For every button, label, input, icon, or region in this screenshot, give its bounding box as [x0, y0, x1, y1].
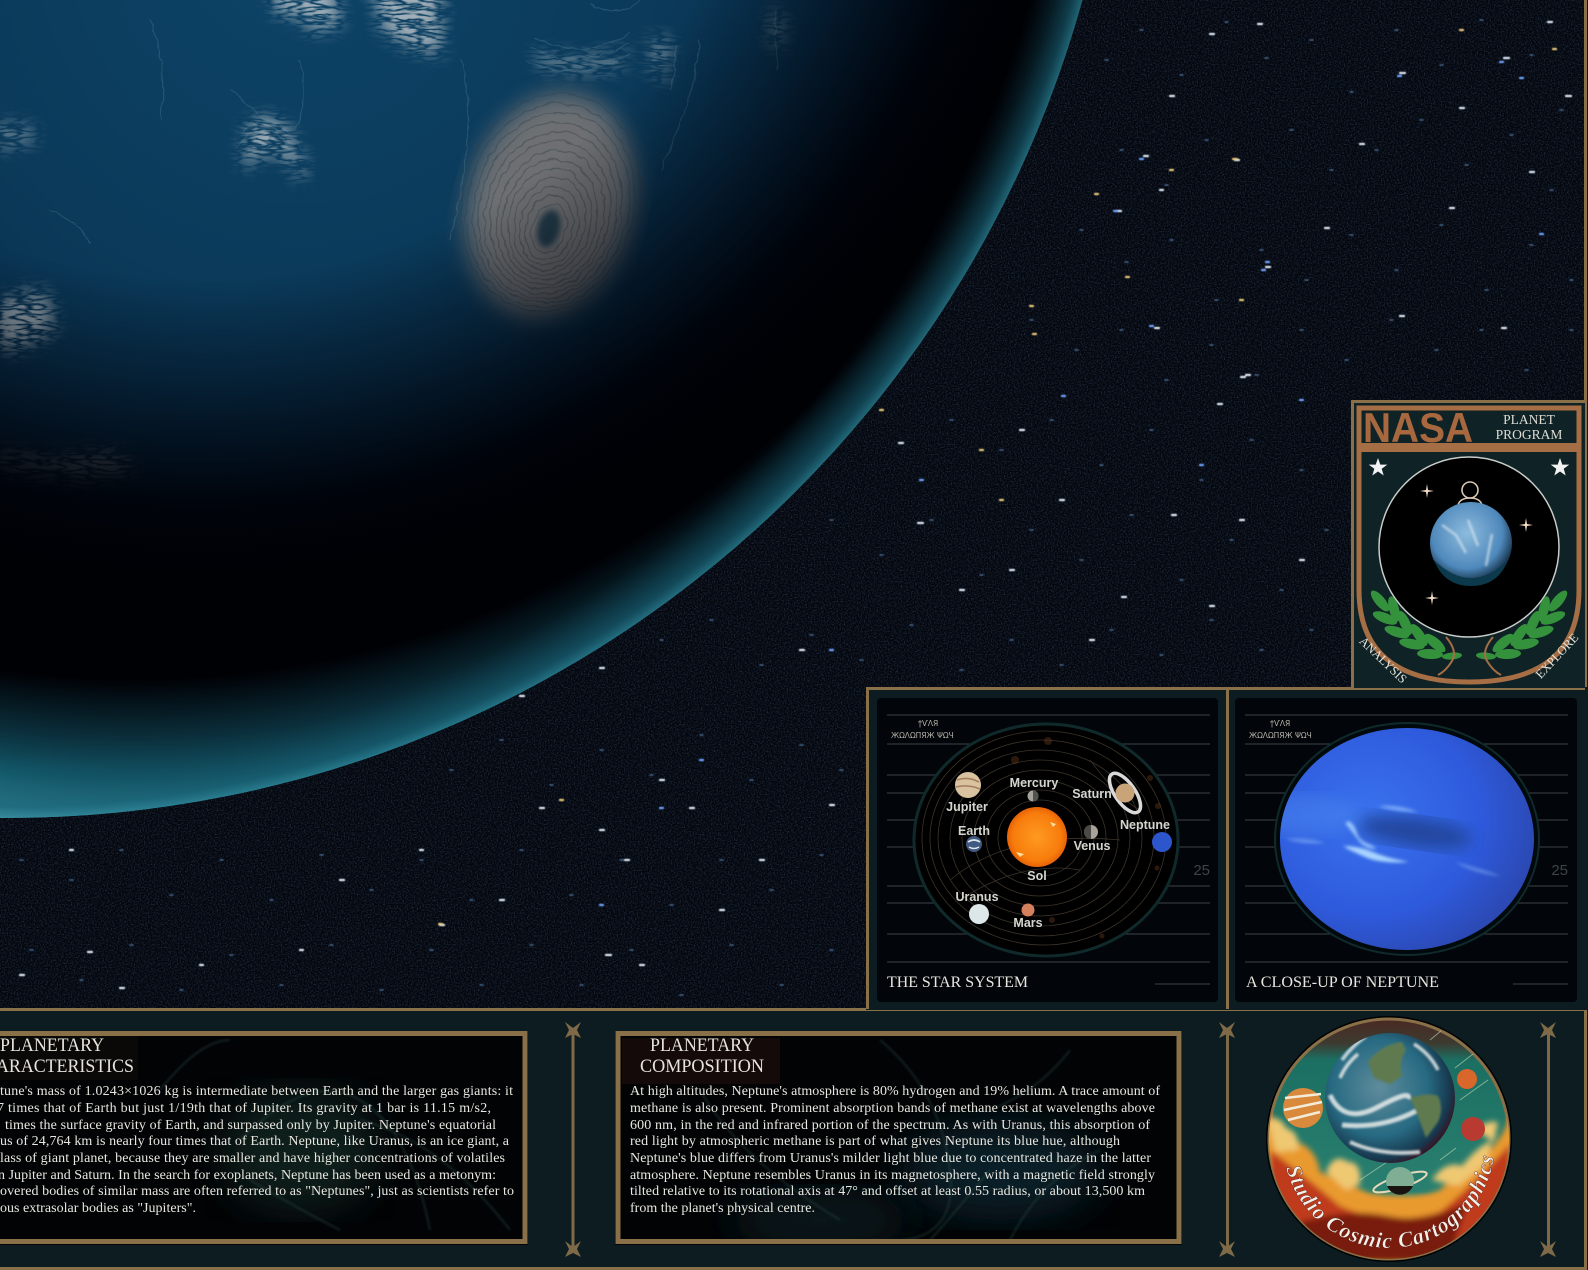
heading	[622, 1036, 780, 1084]
body text: methane is also present. Prominent absorption bands of methane exist at wavelengths above	[630, 1101, 1155, 1116]
script caption: ЖΩΛΩΠЯЖ ΨΩЧ	[891, 731, 954, 740]
clouds	[1269, 1112, 1509, 1259]
ANALYSIS label: ANALYSIS	[1356, 634, 1410, 686]
Neptune	[1120, 818, 1172, 852]
script caption: ϯѴΛЯ	[1270, 719, 1290, 728]
bottom band background	[0, 1008, 1588, 1270]
Sol	[1007, 807, 1067, 883]
saturn	[1372, 1167, 1428, 1196]
divider with ornaments	[1540, 1022, 1556, 1257]
astronaut icon	[1458, 482, 1482, 505]
earth	[1325, 1033, 1455, 1163]
heading	[0, 1036, 138, 1080]
Uranus: Uranus	[955, 890, 999, 904]
Earth	[958, 824, 990, 852]
star icons	[1369, 458, 1569, 476]
cloud bands	[0, 0, 782, 484]
laurel wreath	[1368, 588, 1570, 660]
panel: planetary characteristics	[0, 1031, 528, 1245]
body text: tune's mass of 1.0243×1026 kg is intermediate between Earth and the larger gas giants: it	[0, 1084, 513, 1099]
Mars: Mars	[1013, 916, 1043, 930]
panel title: A CLOSE-UP OF NEPTUNE	[1246, 974, 1439, 991]
shield outline	[1359, 408, 1579, 682]
stripes	[1360, 1030, 1488, 1180]
script caption: ϯѴΛЯ	[918, 719, 938, 728]
Neptune disc	[1274, 722, 1540, 956]
script caption	[891, 719, 954, 740]
body text: ous extrasolar bodies as "Jupiters".	[0, 1201, 196, 1216]
body text: red light by atmospheric methane is part of what gives Neptune its blue hue, although	[630, 1134, 1120, 1149]
program label: PROGRAM	[1496, 427, 1562, 442]
body text: 7 times that of Earth but just 1/19th that of Jupiter. Its gravity at 1 bar is 11.15 m/s2,	[0, 1101, 491, 1116]
blue planet	[1430, 502, 1512, 586]
heading: PLANETARY	[650, 1036, 754, 1056]
curved studio name: Studio Cosmic Cartographics	[1286, 1155, 1494, 1248]
Venus	[1074, 825, 1110, 853]
Mercury	[1010, 776, 1058, 802]
Mercury: Mercury	[1010, 776, 1058, 790]
studio seal	[1266, 1016, 1512, 1262]
badge: NASA planet program	[1351, 400, 1585, 688]
sparkle stars	[1420, 484, 1533, 605]
heading: ARACTERISTICS	[0, 1057, 134, 1077]
Jupiter	[946, 772, 988, 814]
body text: times the surface gravity of Earth, and surpassed only by Jupiter. Neptune's equatorial	[5, 1118, 496, 1133]
body text: atmosphere. Neptune resembles Uranus in its magnetosphere, with a magnetic field strongly	[630, 1168, 1155, 1183]
divider with ornaments	[1219, 1022, 1235, 1257]
orange planet	[1457, 1069, 1477, 1089]
cyclone storm	[451, 78, 648, 328]
divider with ornaments	[565, 1022, 581, 1257]
body text: from the planet's physical centre.	[630, 1201, 815, 1216]
body text: us of 24,764 km is nearly four times that of Earth. Neptune, like Uranus, is an ice giant, a	[0, 1134, 510, 1149]
panel: close-up of Neptune	[1235, 698, 1577, 1002]
body text: overed bodies of similar mass are often referred to as "Neptunes", just as scientists refer to	[0, 1184, 514, 1199]
star field background	[0, 0, 1588, 1010]
atmospheric rim glow	[0, 0, 1090, 840]
panel frame: star system	[866, 687, 1588, 1010]
script caption: ЖΩΛΩΠЯЖ ΨΩЧ	[1249, 731, 1312, 740]
EXPLORE label: EXPLORE	[1533, 630, 1582, 681]
panel title: THE STAR SYSTEM	[887, 974, 1028, 991]
body text: Neptune's blue differs from Uranus's milder light blue due to concentrated haze in the latter	[630, 1151, 1151, 1166]
body text: tilted relative to its rotational axis at 47° and offset at least 0.55 radius, or about 13,500 km	[630, 1184, 1145, 1199]
Saturn: Saturn	[1072, 787, 1112, 801]
Jupiter: Jupiter	[946, 800, 988, 814]
Venus: Venus	[1074, 839, 1110, 853]
Sol: Sol	[1027, 869, 1047, 883]
swirl texture	[160, 1040, 510, 1230]
script caption	[1249, 719, 1312, 740]
Neptune: Neptune	[1120, 818, 1170, 832]
body text	[630, 1084, 1160, 1216]
heading: PLANETARY	[0, 1036, 104, 1056]
body text: n Jupiter and Saturn. In the search for exoplanets, Neptune has been used as a metonym:	[0, 1168, 496, 1183]
body text	[0, 1084, 514, 1216]
page number: 25	[1551, 862, 1568, 879]
Saturn	[1072, 768, 1146, 818]
wreath branches	[1438, 637, 1501, 675]
program label	[1496, 412, 1562, 442]
Mars	[1013, 904, 1043, 930]
circular space window	[1379, 457, 1559, 637]
jupiter	[1283, 1088, 1323, 1128]
heading: COMPOSITION	[640, 1057, 764, 1077]
solar system diagram	[914, 724, 1178, 956]
right edge gold rule	[1584, 0, 1587, 1270]
red planet	[1461, 1117, 1485, 1141]
Earth: Earth	[958, 824, 990, 838]
body text: 600 nm, in the red and infrared portion of the spectrum. As with Uranus, this absorption of	[630, 1118, 1150, 1133]
planet Neptune, dark limb	[0, 0, 1090, 840]
NASA wordmark: NASA	[1363, 404, 1473, 451]
program label: PLANET	[1503, 412, 1556, 427]
Uranus	[955, 890, 999, 924]
page number: 25	[1193, 862, 1210, 879]
swirl texture	[700, 1040, 1100, 1250]
body text: At high altitudes, Neptune's atmosphere is 80% hydrogen and 19% helium. A trace amount of	[630, 1084, 1160, 1099]
body text: lass of giant planet, because they are smaller and have higher concentrations of volatiles	[0, 1151, 505, 1166]
panel: planetary composition	[615, 1031, 1182, 1250]
